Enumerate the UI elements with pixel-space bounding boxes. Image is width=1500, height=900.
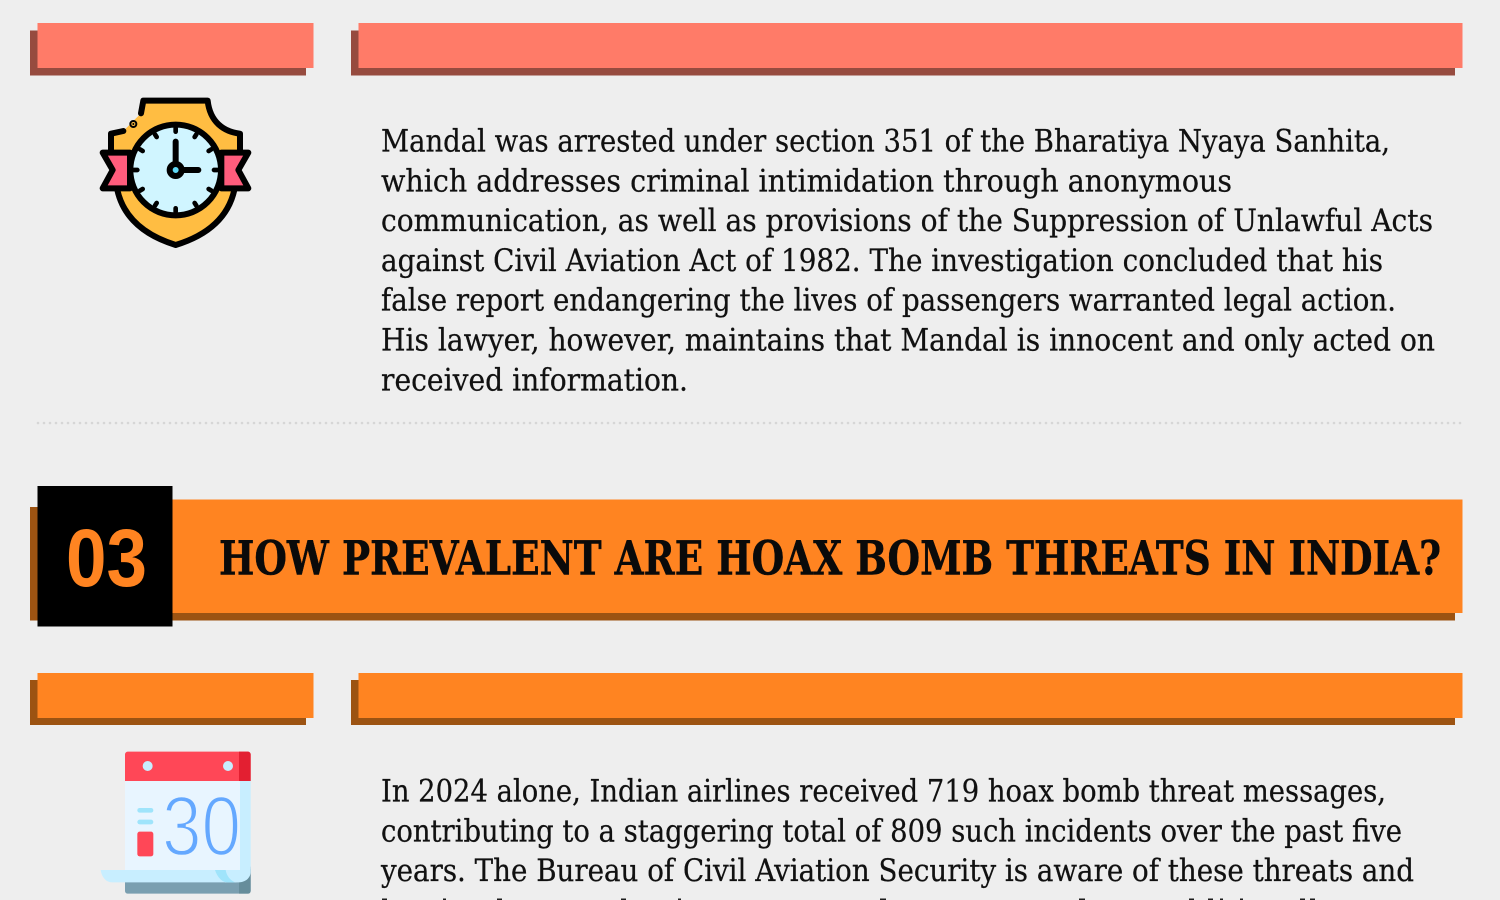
icon: calendar showing 30: 30 [162, 779, 241, 873]
number badge: 03 [66, 513, 147, 604]
text block: arrest and charges: false report endangering the lives of passengers warranted legal action. [381, 284, 1396, 318]
section header: 03 [30, 486, 1462, 626]
icon: calendar showing 30 [101, 752, 251, 894]
icon: shield with clock and ribbon [103, 101, 248, 245]
text block: arrest and charges [381, 124, 1435, 398]
text block: arrest and charges: His lawyer, however, maintains that Mandal is innocent and only acted on [381, 324, 1435, 358]
text block: arrest and charges: communication, as well as provisions of the Suppression of Unlawful Acts [381, 204, 1433, 239]
number badge [38, 486, 172, 626]
panel: legal consequences section [30, 23, 1462, 398]
panel: prevalence section [30, 673, 1462, 900]
heading bar: left column [30, 673, 314, 725]
text block: arrest and charges: against Civil Aviation Act of 1982. The investigation concluded that his [381, 244, 1383, 279]
text block: threat statistics: years. The Bureau of Civil Aviation Security is aware of these threats and [380, 854, 1414, 889]
heading bar: left column [30, 23, 314, 76]
heading bar: right column [351, 23, 1462, 76]
text block: threat statistics: contributing to a staggering total of 809 such incidents over the past five [381, 814, 1402, 850]
text block: arrest and charges: which addresses criminal intimidation through anonymous [381, 164, 1232, 200]
text block: threat statistics [380, 774, 1414, 889]
heading bar: right column [351, 673, 1462, 725]
text block: arrest and charges: received information. [381, 364, 688, 398]
text block: threat statistics: In 2024 alone, Indian airlines received 719 hoax bomb threat messages, [381, 774, 1386, 810]
text block: arrest and charges: Mandal was arrested under section 351 of the Bharatiya Nyaya Sanhita, [381, 124, 1390, 160]
cut-off tops of the next text line at the page edge [382, 898, 1315, 900]
